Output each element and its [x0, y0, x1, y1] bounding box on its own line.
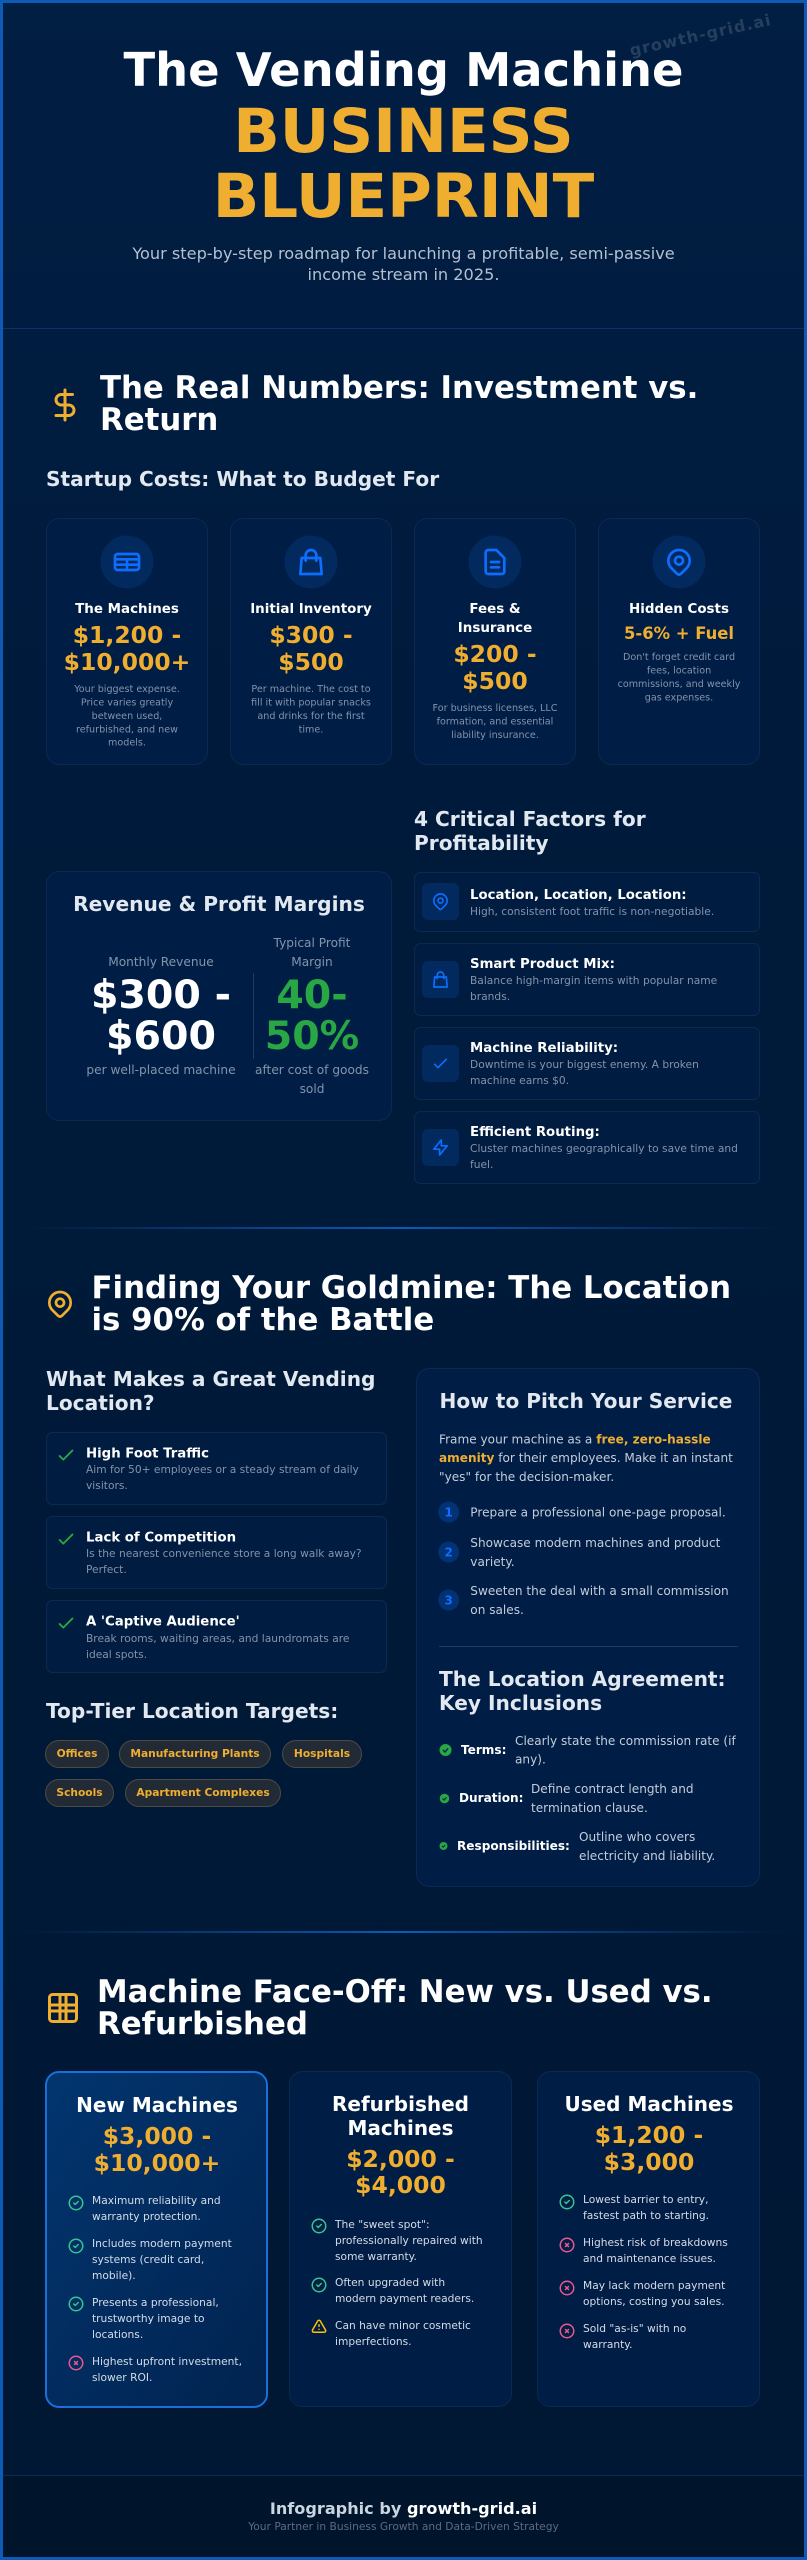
criterion: captive audience: [46, 1600, 386, 1672]
panel: fees and insurance: formation, and essential: [437, 716, 553, 727]
panel: the machines: $1,200 -: [73, 621, 181, 649]
pitch framing text: Frame your machine as a: [439, 1432, 596, 1446]
stat: profit margin: sold: [300, 1082, 324, 1096]
panel: fees and insurance: Fees &: [469, 602, 521, 617]
subtitle: Your step-by-step roadmap for launching a profitable, semi-passive: [131, 244, 675, 263]
panel: the machines: [46, 518, 208, 764]
criterion: foot traffic: High Foot Traffic: [86, 1446, 209, 1462]
factor: reliability: Machine Reliability:: [470, 1041, 618, 1056]
stat: profit margin: Typical Profit: [273, 936, 351, 950]
stat: monthly revenue: $600: [106, 1013, 216, 1059]
step 1: Prepare a professional one-page proposal.: [470, 1506, 726, 1520]
agreement heading: The Location Agreement:: [439, 1667, 726, 1691]
panel: initial inventory: Initial Inventory: [250, 602, 372, 617]
step 1: [438, 1502, 726, 1522]
factor: routing: Efficient Routing:: [470, 1125, 600, 1140]
pros and cons: professionally repaired with: [335, 2234, 483, 2247]
icon: grid: [50, 1994, 76, 2022]
section 3 heading: [50, 1974, 713, 2042]
panel: the machines: $10,000+: [64, 648, 190, 676]
panel: refurbished machines: $2,000 -: [346, 2145, 455, 2173]
section 2 heading: is 90% of the Battle: [92, 1302, 434, 1338]
factor: routing: fuel.: [470, 1158, 493, 1171]
panel: hidden costs: fees, location: [647, 665, 711, 676]
step 2: variety.: [470, 1555, 515, 1569]
duration: Define contract length and: [531, 1782, 694, 1796]
factor: reliability: Downtime is your biggest enemy. A broken: [470, 1058, 699, 1071]
critical factors heading: 4 Critical Factors for: [414, 807, 646, 831]
panel: hidden costs: Hidden Costs: [629, 602, 729, 617]
stat: profit margin: 40-: [276, 972, 348, 1018]
criterion: foot traffic: [46, 1432, 386, 1504]
pros and cons: Highest upfront investment,: [92, 2355, 242, 2368]
panel: hidden costs: gas expenses.: [645, 692, 713, 703]
location tags: Manufacturing Plants: [130, 1747, 260, 1760]
pitch framing text: "yes" for the decision-maker.: [439, 1470, 614, 1484]
panel: new machines: New Machines: [76, 2093, 238, 2117]
pros and cons: Presents a professional,: [92, 2296, 219, 2309]
panel: the machines: refurbished, and new: [76, 724, 178, 735]
location tags: Apartment Complexes: [136, 1786, 270, 1799]
title highlight: BUSINESS: [233, 96, 574, 167]
stat: profit margin: Margin: [291, 955, 333, 969]
stat: monthly revenue: per well-placed machine: [86, 1063, 236, 1077]
step 2: 2: [445, 1546, 453, 1560]
factor: reliability: machine earns $0.: [470, 1074, 569, 1087]
responsibilities: Responsibilities:: [457, 1839, 570, 1853]
agreement heading: Key Inclusions: [439, 1691, 602, 1715]
panel: initial inventory: [230, 518, 392, 764]
stat: monthly revenue: $300 -: [91, 972, 231, 1018]
panel: used machines: Used Machines: [564, 2092, 734, 2116]
section 3 heading: Machine Face-Off: New vs. Used vs.: [97, 1974, 713, 2010]
factor: location: Location, Location, Location:: [470, 888, 687, 903]
factor: product mix: Balance high-margin items with popular name: [470, 974, 717, 987]
panel: initial inventory: $500: [278, 648, 344, 676]
panel: hidden costs: Don't forget credit card: [623, 652, 735, 663]
factor: location: [414, 872, 760, 932]
term: Terms:: [461, 1743, 506, 1757]
panel: the machines: models.: [108, 738, 146, 749]
term: Clearly state the commission rate (if: [515, 1734, 736, 1748]
stat: monthly revenue: [86, 955, 236, 1077]
panel: initial inventory: $300 -: [269, 621, 353, 649]
pros and cons: [69, 2194, 242, 2384]
pros and cons: trustworthy image to: [92, 2312, 205, 2325]
criterion: captive audience: ideal spots.: [86, 1648, 147, 1661]
factor: reliability: [414, 1028, 760, 1100]
stat: profit margin: [255, 936, 369, 1096]
section 3 heading: Refurbished: [97, 2006, 308, 2042]
panel: revenue and profit margins: [46, 872, 392, 1120]
responsibilities: [440, 1830, 715, 1863]
icon: shopping bag: [300, 550, 322, 574]
pros and cons: and maintenance issues.: [583, 2252, 716, 2265]
pros and cons: Can have minor cosmetic: [335, 2319, 471, 2332]
heading: The Real Numbers: Investment vs.: [100, 370, 698, 406]
duration: Duration:: [459, 1791, 523, 1805]
panel: hidden costs: commissions, and weekly: [618, 679, 741, 690]
footer: [247, 2499, 559, 2533]
pros and cons: Includes modern payment: [92, 2237, 232, 2250]
panel: refurbished machines: Refurbished: [332, 2092, 469, 2116]
criterion: competition: Is the nearest convenience store a long walk away?: [86, 1547, 362, 1560]
pros and cons: mobile).: [92, 2269, 136, 2282]
duration: termination clause.: [531, 1801, 648, 1815]
pitch framing text: for their employees. Make it an instant: [494, 1451, 733, 1465]
location tags: Schools: [56, 1786, 103, 1799]
panel: used machines: $1,200 -: [595, 2121, 703, 2149]
pitch framing text: free, zero-hassle: [596, 1432, 711, 1446]
footer: Your Partner in Business Growth and Data-Driven Strategy: [247, 2520, 559, 2533]
header: [123, 43, 684, 284]
panel: fees and insurance: $500: [462, 667, 528, 695]
step 2: Showcase modern machines and product: [470, 1536, 721, 1550]
watermark: growth-grid.ai: [628, 10, 773, 60]
startup costs heading: Startup Costs: What to Budget For: [46, 467, 439, 491]
pros and cons: Sold "as-is" with no: [583, 2322, 686, 2335]
panel: used machines: [538, 2072, 760, 2406]
responsibilities: Outline who covers: [579, 1830, 695, 1844]
what makes a great location heading: Location?: [46, 1391, 155, 1415]
panel: fees and insurance: liability insurance.: [451, 730, 539, 741]
panel: initial inventory: fill it with popular snacks: [251, 697, 371, 708]
panel: fees and insurance: For business licenses, LLC: [433, 703, 558, 714]
heading: Return: [100, 402, 218, 438]
panel: how to pitch: [416, 1368, 760, 1886]
icon: location pin: [49, 1292, 71, 1317]
pros and cons: [312, 2218, 483, 2348]
panel: hidden costs: 5-6% + Fuel: [624, 624, 734, 643]
section 1 heading: [56, 370, 698, 438]
stat: profit margin: 50%: [265, 1013, 359, 1059]
icon: dollar: [56, 390, 74, 420]
panel: fees and insurance: [414, 518, 576, 764]
location tags: Offices: [57, 1747, 97, 1760]
panel: the machines: The Machines: [75, 602, 179, 617]
panel: new machines: $3,000 -: [103, 2122, 211, 2150]
pros and cons: Often upgraded with: [335, 2276, 445, 2289]
panel: refurbished machines: Machines: [347, 2116, 454, 2140]
criterion: competition: Lack of Competition: [86, 1530, 236, 1546]
panel: refurbished machines: $4,000: [355, 2171, 446, 2199]
step 2: [438, 1536, 721, 1569]
title: The Vending Machine: [123, 43, 684, 97]
pros and cons: locations.: [92, 2328, 143, 2341]
pros and cons: imperfections.: [335, 2335, 412, 2348]
pros and cons: slower ROI.: [92, 2371, 152, 2384]
pros and cons: systems (credit card,: [92, 2253, 204, 2266]
duration: [440, 1782, 694, 1815]
pros and cons: modern payment readers.: [335, 2292, 474, 2305]
factor: routing: [414, 1112, 760, 1184]
critical factors heading: Profitability: [414, 831, 549, 855]
footer: Infographic by growth-grid.ai: [270, 2499, 537, 2518]
step 3: Sweeten the deal with a small commission: [470, 1584, 729, 1598]
pros and cons: some warranty.: [335, 2250, 417, 2263]
pros and cons: [560, 2193, 728, 2351]
term: any).: [515, 1752, 546, 1766]
stat: profit margin: after cost of goods: [255, 1063, 369, 1077]
panel: hidden costs: [598, 518, 760, 764]
panel: fees and insurance: Insurance: [458, 621, 532, 636]
step 3: 3: [445, 1594, 453, 1608]
factor: product mix: [414, 944, 760, 1016]
icon: document: [486, 550, 504, 574]
panel: initial inventory: Per machine. The cost to: [251, 684, 371, 695]
stat: monthly revenue: Monthly Revenue: [108, 955, 214, 969]
panel: new machines: [46, 2072, 267, 2407]
title highlight: BLUEPRINT: [213, 161, 595, 232]
panel: revenue and profit margins: Revenue & Profit Margins: [73, 892, 365, 916]
icon: table: [115, 554, 139, 570]
criterion: captive audience: A 'Captive Audience': [86, 1614, 240, 1630]
pros and cons: The "sweet spot":: [334, 2218, 430, 2231]
panel: initial inventory: and drinks for the first: [257, 711, 365, 722]
panel: initial inventory: time.: [299, 724, 323, 735]
section 2 heading: Finding Your Goldmine: The Location: [92, 1270, 731, 1306]
top-tier targets heading: Top-Tier Location Targets:: [46, 1699, 338, 1723]
panel: fees and insurance: $200 -: [453, 640, 537, 668]
step 3: on sales.: [470, 1603, 524, 1617]
panel: used machines: $3,000: [604, 2148, 694, 2176]
pros and cons: fastest path to starting.: [583, 2209, 709, 2222]
pros and cons: Maximum reliability and: [92, 2194, 221, 2207]
criterion: captive audience: Break rooms, waiting areas, and laundromats are: [86, 1632, 349, 1645]
criterion: competition: Perfect.: [86, 1563, 127, 1576]
factor: location: High, consistent foot traffic is non-negotiable.: [470, 905, 714, 918]
panel: the machines: between used,: [92, 711, 162, 722]
section 2 heading: [49, 1270, 731, 1338]
pros and cons: options, costing you sales.: [583, 2295, 725, 2308]
criterion: competition: [46, 1516, 386, 1588]
criterion: foot traffic: Aim for 50+ employees or a steady stream of daily: [86, 1463, 359, 1476]
panel: the machines: Your biggest expense.: [73, 684, 180, 695]
step 1: 1: [445, 1506, 453, 1520]
pros and cons: warranty.: [583, 2338, 632, 2351]
what makes a great location heading: What Makes a Great Vending: [46, 1367, 375, 1391]
pitch framing text: amenity: [439, 1451, 495, 1465]
subtitle: income stream in 2025.: [308, 265, 500, 284]
factor: routing: Cluster machines geographically to save time and: [470, 1142, 738, 1155]
pros and cons: May lack modern payment: [583, 2279, 725, 2292]
term: [440, 1734, 736, 1766]
panel: how to pitch: How to Pitch Your Service: [440, 1389, 732, 1413]
icon: location pin: [668, 550, 690, 575]
step 3: [438, 1584, 729, 1617]
criterion: foot traffic: visitors.: [86, 1479, 128, 1492]
location tags: [46, 1740, 362, 1806]
panel: new machines: $10,000+: [94, 2149, 220, 2177]
factor: product mix: brands.: [470, 990, 510, 1003]
location tags: Hospitals: [294, 1747, 350, 1760]
panel: refurbished machines: [290, 2072, 512, 2406]
pros and cons: warranty protection.: [92, 2210, 201, 2223]
responsibilities: electricity and liability.: [579, 1849, 715, 1863]
factor: product mix: Smart Product Mix:: [470, 957, 615, 972]
pros and cons: Highest risk of breakdowns: [583, 2236, 728, 2249]
panel: the machines: Price varies greatly: [81, 697, 173, 708]
pros and cons: Lowest barrier to entry,: [583, 2193, 708, 2206]
